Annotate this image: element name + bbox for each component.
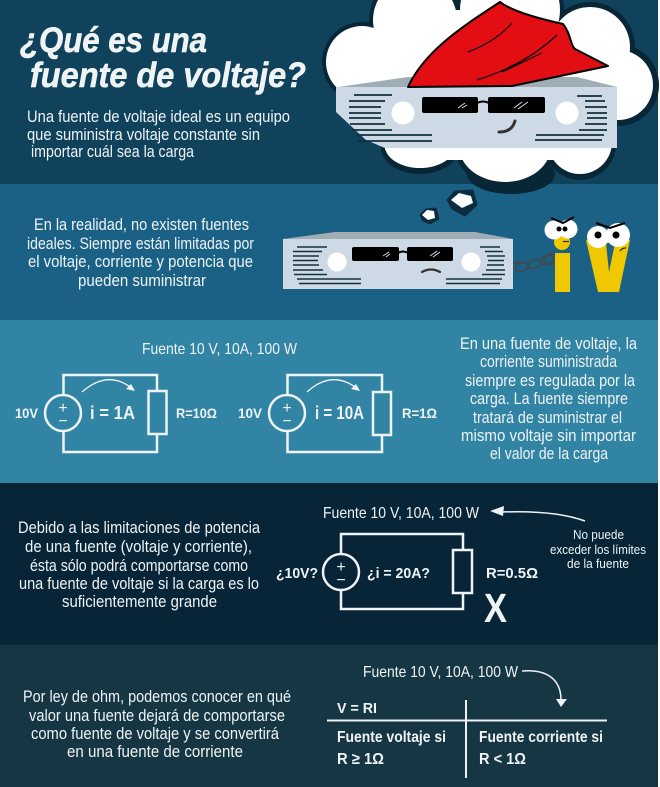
circuit: 10 A with 1 ohm: R=1Ω <box>402 405 437 421</box>
text: ideal source definition: que suministra voltaje constante sin <box>27 126 260 144</box>
text: reality paragraph: En la realidad, no existen fuentes <box>34 216 249 234</box>
callout: cannot exceed limits: No puede <box>573 527 624 542</box>
panel: power limits <box>0 483 658 645</box>
circuit: 20 A with 0.5 ohm: + <box>336 559 346 576</box>
circuit: 1 A with 10 ohm: 10V <box>15 405 39 421</box>
icon: superhero power supply <box>336 2 617 148</box>
circuit: 20 A with 0.5 ohm: − <box>336 572 346 589</box>
title <box>20 21 306 95</box>
icon: chain linking source to i <box>513 252 559 273</box>
text: regulation explanation: el valor de la carga <box>490 445 609 463</box>
text: limits paragraph: de una fuente (voltaje y corriente), <box>25 538 252 556</box>
circuit: 1 A with 10 ohm <box>15 375 217 452</box>
circuit: 20 A with 0.5 ohm: ¿10V? <box>276 565 318 582</box>
text: reality paragraph: ideales. Siempre están limitadas por <box>27 235 254 253</box>
icon: thought cloud <box>322 0 659 194</box>
text: regulation explanation: tratará de suministrar el <box>473 409 622 427</box>
text: limits paragraph: una fuente de voltaje si la carga es lo <box>19 575 259 593</box>
text: source rating: Fuente 10 V, 10A, 100 W <box>142 341 298 358</box>
text: ideal source definition: importar cuál sea la carga <box>31 143 195 161</box>
panel: current regulated by the load <box>0 320 658 483</box>
circuit: 20 A with 0.5 ohm: R=0.5Ω <box>486 565 538 582</box>
text: regulation explanation <box>460 335 638 463</box>
table: voltage vs current source: Fuente voltaje si <box>337 729 446 746</box>
text: regulation explanation: En una fuente de voltaje, la <box>460 335 638 353</box>
panel: what is a voltage source <box>0 0 659 194</box>
text: limits paragraph: ésta sólo podrá comportarse como <box>30 557 248 575</box>
icon: sad power supply with sunglasses <box>283 232 513 289</box>
table: voltage vs current source: R ≥ 1Ω <box>337 751 384 768</box>
title: ¿Qué es una <box>20 21 207 60</box>
table: voltage vs current source: R < 1Ω <box>479 751 526 768</box>
text: ohm's law paragraph: Por ley de ohm, podemos conocer en qué <box>23 688 291 706</box>
circuit: 20 A with 0.5 ohm <box>276 534 538 631</box>
title: fuente de voltaje? <box>30 56 306 95</box>
text: ohm's law paragraph: valor una fuente dejará de comportarse <box>29 707 285 725</box>
circuit: 1 A with 10 ohm: − <box>58 413 68 430</box>
text: reality paragraph <box>27 216 254 290</box>
icon: thought bubbles <box>420 190 477 224</box>
text: limits paragraph: suficientemente grande <box>62 593 217 611</box>
arrow: to table <box>522 671 567 707</box>
callout: cannot exceed limits: de la fuente <box>567 556 629 571</box>
icon: angry letter V <box>586 223 630 292</box>
circuit: 20 A with 0.5 ohm: ¿i = 20A? <box>367 565 430 582</box>
text: limits paragraph <box>18 519 261 611</box>
arrow: to source rating <box>490 506 585 521</box>
text: regulation explanation: siempre es regulada por la <box>465 372 636 390</box>
circuit: 10 A with 1 ohm: − <box>282 413 292 430</box>
text: regulation explanation: mismo voltaje sin importar <box>461 427 636 445</box>
text: source rating: Fuente 10 V, 10A, 100 W <box>323 505 480 522</box>
text: regulation explanation: carga. La fuente siempre <box>470 390 628 408</box>
callout: cannot exceed limits: exceder los límites <box>550 542 646 557</box>
circuit: 20 A with 0.5 ohm: X <box>484 585 507 631</box>
text: regulation explanation: corriente suministrada <box>480 353 618 371</box>
text: limits paragraph: Debido a las limitaciones de potencia <box>18 519 261 537</box>
circuit: 10 A with 1 ohm: 10V <box>238 405 263 421</box>
circuit: 10 A with 1 ohm <box>238 375 437 452</box>
table: voltage vs current source <box>327 700 607 778</box>
text: ohm's law paragraph: como fuente de voltaje y se convertirá <box>31 725 280 743</box>
icon: red cape <box>408 2 608 87</box>
text: ideal source definition: Una fuente de voltaje ideal es un equipo <box>27 108 290 126</box>
text: reality paragraph: pueden suministrar <box>78 272 206 290</box>
callout: cannot exceed limits <box>550 527 646 571</box>
panel: reality of real sources <box>0 184 658 320</box>
circuit: 1 A with 10 ohm: i = 1A <box>90 403 135 423</box>
text: source rating: Fuente 10 V, 10A, 100 W <box>363 664 519 681</box>
text: reality paragraph: el voltaje, corriente y potencia que <box>28 253 253 271</box>
circuit: 10 A with 1 ohm: + <box>282 400 292 417</box>
table: voltage vs current source: V = RI <box>337 700 377 717</box>
icon: angry letter i <box>544 217 578 292</box>
text: ohm's law paragraph <box>23 688 291 761</box>
circuit: 1 A with 10 ohm: + <box>58 400 68 417</box>
circuit: 1 A with 10 ohm: R=10Ω <box>176 405 217 421</box>
circuit: 10 A with 1 ohm: i = 10A <box>315 403 364 423</box>
text: ideal source definition <box>27 108 290 161</box>
table: voltage vs current source: Fuente corriente si <box>479 729 603 746</box>
panel: ohm's law <box>0 645 658 787</box>
text: ohm's law paragraph: en una fuente de corriente <box>67 743 243 761</box>
